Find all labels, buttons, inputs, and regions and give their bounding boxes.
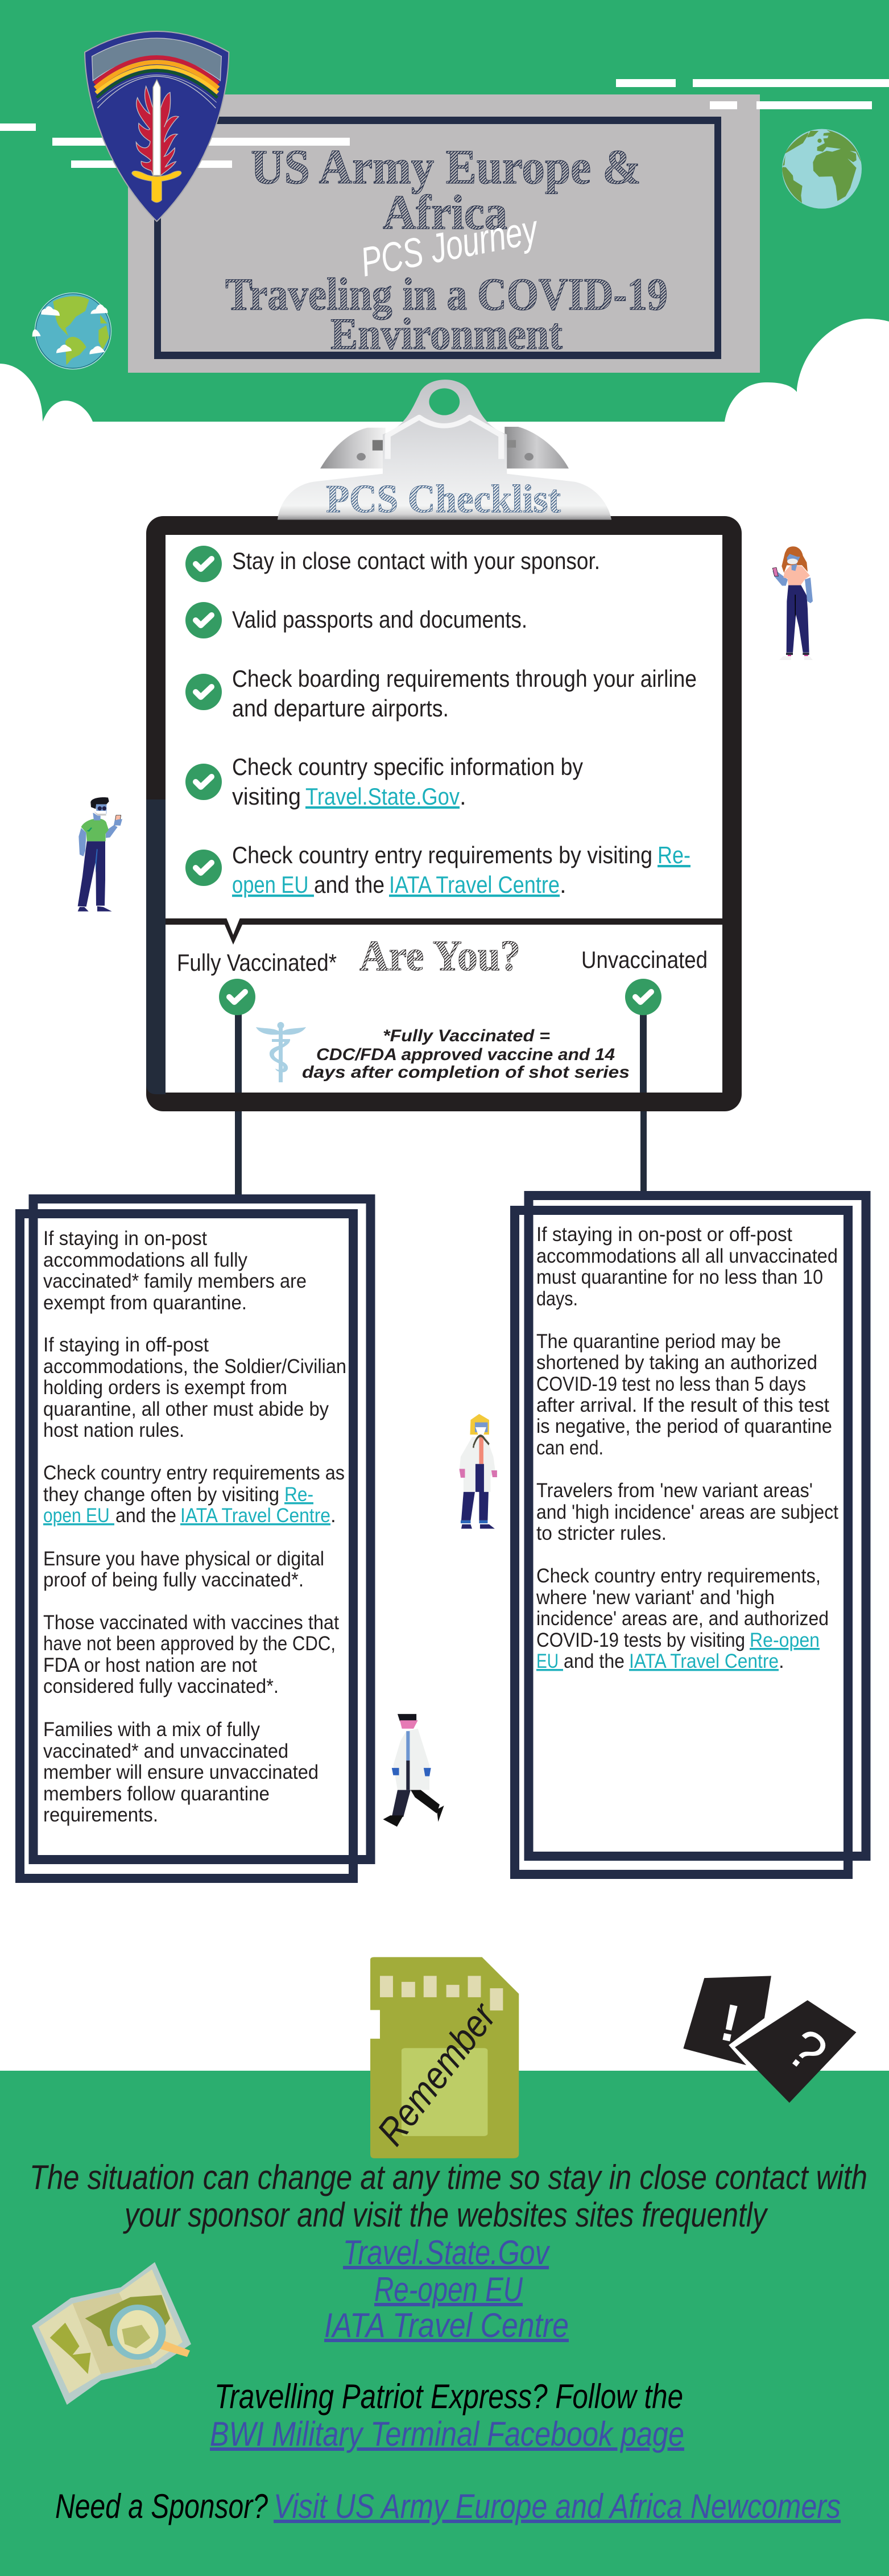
text: need a sponsor: Need a Sponsor?: [55, 2487, 268, 2525]
text: need a sponsor: [55, 2487, 841, 2525]
title: Traveling in a COVID-19: [225, 270, 668, 320]
text: fully vaccinated guidance: and the: [115, 1505, 176, 1527]
checklist item 4: Travel.State.Gov: [305, 783, 460, 810]
icon: check fully vaccinated: [219, 979, 255, 1015]
text: unvaccinated guidance: Check country entry requirements,: [536, 1565, 821, 1587]
text: fully vaccinated guidance: [43, 1227, 346, 1826]
text: fully vaccinated guidance: exempt from quarantine.: [43, 1292, 247, 1314]
label: Fully Vaccinated: Fully Vaccinated*: [177, 949, 337, 976]
text: fully vaccinated guidance: If staying in off-post: [43, 1334, 209, 1356]
text: fully vaccinated guidance: IATA Travel Centre: [180, 1505, 330, 1527]
text: unvaccinated guidance: COVID-19 tests by visiting: [536, 1629, 745, 1651]
text: unvaccinated guidance: where 'new variant' and 'high: [536, 1586, 775, 1609]
text: fully vaccinated guidance: Check country entry requirements as: [43, 1462, 345, 1484]
divider with pointer: [166, 918, 722, 945]
text: unvaccinated guidance: COVID-19 test no less than 5 days: [536, 1373, 806, 1395]
icon: check unvaccinated: [625, 979, 661, 1015]
checklist item 1: [185, 546, 600, 582]
panel: fully vaccinated: [20, 1199, 371, 1878]
title: [225, 139, 668, 358]
label: Remember: Remember: [369, 1994, 505, 2153]
icon: left globe with clouds: [32, 293, 111, 369]
title: US Army Europe &: [251, 139, 641, 194]
text: fully vaccinated guidance: vaccinated* family members are: [43, 1270, 307, 1292]
text: unvaccinated guidance: Travelers from 'new variant areas': [536, 1479, 813, 1502]
text: unvaccinated guidance: [536, 1223, 838, 1672]
text: closing message: your sponsor and visit the websites sites frequently: [123, 2196, 768, 2234]
text: unvaccinated guidance: days.: [536, 1288, 578, 1310]
checklist item 4: [185, 753, 583, 810]
heading: Are You?: Are You?: [359, 932, 520, 980]
checklist item 3: [185, 665, 697, 722]
label: Unvaccinated: Unvaccinated: [581, 946, 708, 973]
text: Patriot Express: BWI Military Terminal Facebook page: [210, 2415, 684, 2453]
note: fully vaccinated definition: days after completion of shot series: [302, 1063, 630, 1082]
text: fully vaccinated guidance: members follow quarantine: [43, 1783, 270, 1805]
subtitle: PCS Journey: PCS Journey: [357, 207, 543, 286]
footer background: [0, 2071, 889, 2576]
text: fully vaccinated guidance: Ensure you have physical or digital: [43, 1548, 324, 1570]
text: unvaccinated guidance: can end.: [536, 1437, 603, 1459]
text: closing message: [30, 2158, 867, 2344]
checklist item 5: IATA Travel Centre: [389, 871, 560, 898]
panel: checklist board: [146, 516, 742, 1111]
text: unvaccinated guidance: and 'high incidence' areas are subject: [536, 1501, 838, 1523]
text: fully vaccinated guidance: they change often by visiting: [43, 1483, 279, 1506]
text: Patriot Express: [210, 2377, 684, 2453]
text: unvaccinated guidance: accommodations all all unvaccinated: [536, 1245, 838, 1267]
text: unvaccinated guidance: must quarantine for no less than 10: [536, 1266, 823, 1288]
title panel: [128, 94, 760, 373]
text: unvaccinated guidance: after arrival. If the result of this test: [536, 1394, 829, 1416]
heading: PCS Checklist: PCS Checklist: [326, 477, 561, 521]
text: fully vaccinated guidance: Families with a mix of fully: [43, 1718, 260, 1741]
text: unvaccinated guidance: If staying in on-post or off-post: [536, 1223, 792, 1246]
text: closing message: IATA Travel Centre: [324, 2306, 569, 2344]
icon: exclamation and question cards: [683, 1976, 856, 2103]
note: fully vaccinated definition: [302, 1027, 630, 1082]
checklist item 5: open EU: [232, 871, 314, 898]
text: fully vaccinated guidance: holding orders is exempt from: [43, 1376, 287, 1399]
figure: male doctor: [383, 1714, 444, 1827]
text: fully vaccinated guidance: .: [330, 1505, 336, 1527]
clouds: [0, 319, 889, 422]
header background: [0, 0, 889, 422]
icon: exclamation and question cards: !: [716, 1993, 745, 2054]
checklist item 4: .: [460, 783, 466, 810]
figure: woman with phone: [772, 546, 813, 660]
icon: map with magnifying glass: [32, 2262, 191, 2405]
checklist item 5: .: [560, 871, 567, 898]
icon: caduceus: [256, 1022, 306, 1082]
checklist item 4: Check country specific information by: [232, 753, 583, 780]
checklist item 5: Check country entry requirements by visiting: [232, 842, 652, 868]
speed streaks: [0, 79, 889, 168]
text: unvaccinated guidance: to stricter rules.: [536, 1522, 667, 1544]
checklist item 5: and the: [314, 871, 384, 898]
checklist item 5: Re-: [658, 842, 690, 868]
text: Patriot Express: Travelling Patriot Express? Follow the: [214, 2377, 683, 2416]
text: unvaccinated guidance: EU: [536, 1650, 563, 1672]
checklist item 5: [185, 842, 690, 898]
text: unvaccinated guidance: incidence' areas are, and authorized: [536, 1608, 829, 1630]
checklist item 2: Valid passports and documents.: [232, 606, 527, 633]
text: closing message: Re-open EU: [374, 2270, 523, 2309]
checklist item 4: visiting: [232, 783, 301, 810]
text: fully vaccinated guidance: FDA or host nation are not: [43, 1654, 257, 1676]
text: fully vaccinated guidance: If staying in on-post: [43, 1227, 207, 1250]
icon: clipboard clip: [278, 380, 611, 520]
text: unvaccinated guidance: IATA Travel Centre: [629, 1650, 779, 1672]
text: fully vaccinated guidance: member will ensure unvaccinated: [43, 1761, 319, 1783]
figure: man with phone: [78, 797, 122, 912]
icon: exclamation and question cards: ?: [776, 2016, 838, 2084]
checklist item 3: and departure airports.: [232, 695, 449, 722]
text: fully vaccinated guidance: requirements.: [43, 1804, 158, 1826]
icon: USAREUR shield: [85, 31, 229, 221]
connector: lines to lower panels: [235, 1111, 647, 1195]
text: unvaccinated guidance: .: [779, 1650, 784, 1672]
text: fully vaccinated guidance: Those vaccinated with vaccines that: [43, 1611, 339, 1634]
text: fully vaccinated guidance: quarantine, all other must abide by: [43, 1398, 329, 1420]
icon: memory card: [370, 1957, 519, 2158]
connector: vaccination lines inside board: [235, 1015, 647, 1093]
text: fully vaccinated guidance: have not been approved by the CDC,: [43, 1633, 336, 1655]
text: unvaccinated guidance: The quarantine period may be: [536, 1330, 781, 1353]
checklist item 1: Stay in close contact with your sponsor.: [232, 547, 600, 574]
text: fully vaccinated guidance: considered fully vaccinated*.: [43, 1675, 279, 1697]
text: fully vaccinated guidance: Re-: [284, 1483, 313, 1506]
panel: unvaccinated: [515, 1196, 866, 1874]
text: fully vaccinated guidance: open EU: [43, 1505, 114, 1527]
note: fully vaccinated definition: *Fully Vaccinated =: [383, 1027, 550, 1045]
text: unvaccinated guidance: and the: [564, 1650, 625, 1672]
text: fully vaccinated guidance: host nation rules.: [43, 1419, 184, 1441]
note: fully vaccinated definition: CDC/FDA approved vaccine and 14: [316, 1045, 615, 1064]
title: Environment: [330, 309, 563, 358]
text: fully vaccinated guidance: proof of being fully vaccinated*.: [43, 1569, 304, 1591]
figure: female doctor: [459, 1414, 497, 1528]
text: fully vaccinated guidance: accommodations all fully: [43, 1249, 247, 1271]
text: closing message: Travel.State.Gov: [343, 2233, 550, 2272]
title: Africa: [383, 185, 507, 240]
text: unvaccinated guidance: Re-open: [750, 1629, 820, 1651]
icon: right globe: [782, 129, 862, 209]
checklist item 3: Check boarding requirements through your airline: [232, 665, 697, 692]
text: unvaccinated guidance: is negative, the period of quarantine: [536, 1415, 832, 1437]
text: unvaccinated guidance: shortened by taking an authorized: [536, 1351, 817, 1374]
checklist item 2: [185, 602, 527, 638]
text: fully vaccinated guidance: vaccinated* and unvaccinated: [43, 1740, 288, 1762]
text: fully vaccinated guidance: accommodations, the Soldier/Civilian: [43, 1355, 346, 1378]
